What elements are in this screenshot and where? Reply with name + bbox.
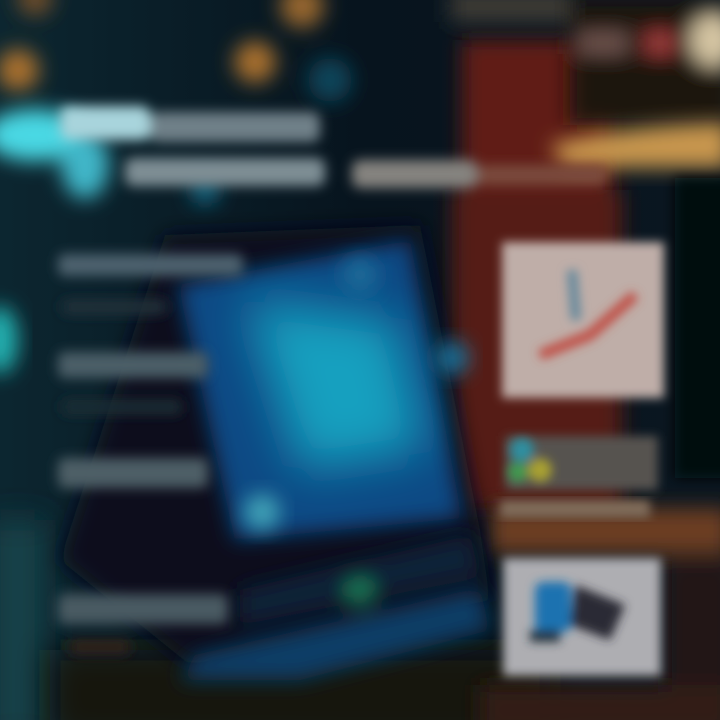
text line 3 [58, 458, 208, 488]
icon: cyan glow [0, 109, 219, 204]
laptop [0, 225, 490, 680]
chart: red and blue lines [540, 270, 635, 355]
text block: left column lines [58, 254, 243, 654]
panel: top chart card [502, 242, 664, 398]
laptop keyboard [180, 535, 490, 680]
text line 2 [58, 352, 208, 378]
panel: wooden desk [480, 508, 720, 720]
laptop screen [178, 240, 462, 540]
panel: top right backdrop [450, 0, 720, 125]
panel: middle icon card [500, 436, 658, 518]
panel: red wall [452, 40, 622, 510]
icon: blue and dark figure [530, 582, 625, 642]
text line 4 [58, 594, 228, 624]
icons: orange lights [0, 0, 352, 102]
panel: warm light band [550, 122, 720, 168]
text line 1 [58, 254, 243, 276]
text line under logo [500, 500, 650, 518]
screen highlights [0, 257, 469, 530]
panel: right dark device [675, 178, 720, 478]
panel: bottom icon card [503, 558, 661, 676]
title: glowing heading [0, 106, 607, 204]
laptop body [60, 225, 490, 665]
icon: colourful logo [508, 438, 552, 482]
heading line 1 [60, 106, 320, 142]
heading line 2 [125, 158, 607, 188]
